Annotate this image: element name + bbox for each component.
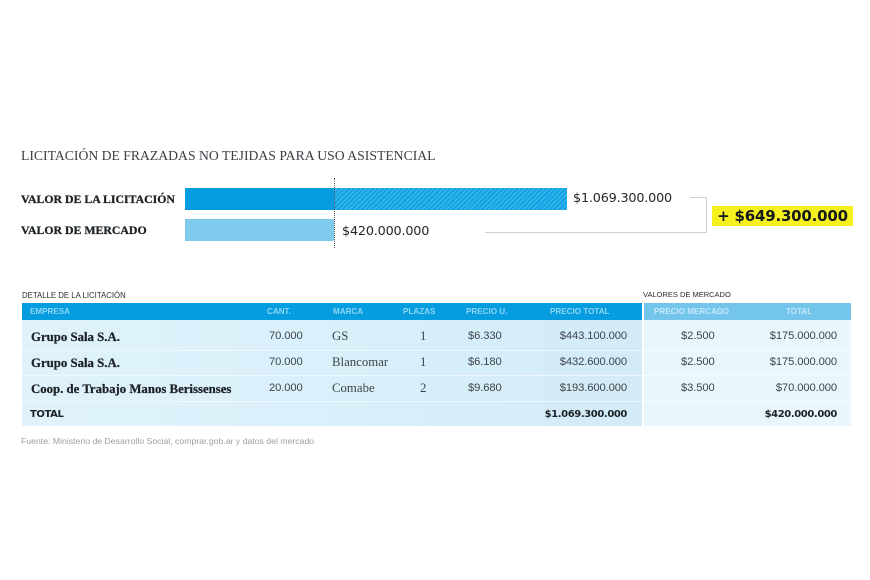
- market row 1: $175.000.000: [770, 330, 837, 342]
- market row 3: $3.500: [681, 382, 715, 394]
- dashed reference line: [334, 178, 335, 248]
- column headers: MARCA: [333, 307, 363, 316]
- row 3: $9.680: [468, 382, 502, 394]
- bar: licitación solid part: [185, 188, 334, 210]
- table body background: [22, 320, 642, 426]
- row 3: [31, 381, 627, 396]
- row 2: Blancomar: [332, 355, 388, 369]
- label: valor de mercado: VALOR DE MERCADO: [21, 223, 147, 237]
- row 1: GS: [332, 329, 348, 343]
- column headers: PLAZAS: [403, 307, 435, 316]
- market row 2: $175.000.000: [770, 356, 837, 368]
- market row dividers: [644, 350, 851, 351]
- panel: tabla licitación: [22, 303, 642, 426]
- callout: difference: + $649.300.000: [717, 207, 848, 225]
- difference connector: [485, 197, 707, 233]
- heading: valores de mercado: VALORES DE MERCADO: [643, 290, 731, 299]
- column headers: [30, 307, 610, 316]
- row 2: Grupo Sala S.A.: [31, 356, 120, 370]
- market row 1: [681, 330, 837, 342]
- row 1: Grupo Sala S.A.: [31, 330, 120, 344]
- bar chart: [21, 178, 853, 248]
- row 1: $6.330: [468, 330, 502, 342]
- row 1: $443.100.000: [560, 330, 627, 342]
- market row 2: [681, 356, 837, 368]
- panel: tabla mercado: [644, 303, 851, 426]
- market header bar: [644, 303, 851, 320]
- market row 2: $2.500: [681, 356, 715, 368]
- market total: $420.000.000: [765, 409, 837, 420]
- bar: licitación excess hatched part: [334, 188, 567, 210]
- row 2: 1: [420, 355, 426, 369]
- row 1: 70.000: [269, 330, 303, 342]
- row dividers: [22, 350, 642, 351]
- heading: detalle de la licitación: DETALLE DE LA LICITACIÓN: [22, 291, 126, 300]
- row 1: 1: [420, 329, 426, 343]
- total row: $1.069.300.000: [545, 409, 627, 420]
- row 3: Coop. de Trabajo Manos Berissenses: [31, 382, 231, 396]
- row 3: 2: [420, 381, 426, 395]
- column headers: EMPRESA: [30, 307, 70, 316]
- total row: [30, 409, 627, 420]
- column headers: PRECIO U.: [466, 307, 507, 316]
- market row 1: $2.500: [681, 330, 715, 342]
- title: LICITACIÓN DE FRAZADAS NO TEJIDAS PARA USO ASISTENCIAL: [21, 148, 436, 163]
- source note: Fuente: Ministerio de Desarrollo Social, comprar.gob.ar y datos del mercado: [21, 436, 314, 446]
- row 2: 70.000: [269, 356, 303, 368]
- row 3: $193.600.000: [560, 382, 627, 394]
- table header bar: [22, 303, 642, 320]
- row 3: Comabe: [332, 381, 375, 395]
- row 2: $6.180: [468, 356, 502, 368]
- value: licitación: $1.069.300.000: [573, 191, 672, 206]
- row 2: $432.600.000: [560, 356, 627, 368]
- row 2: [31, 355, 627, 370]
- value: mercado: $420.000.000: [342, 224, 429, 239]
- market row 3: [681, 382, 837, 394]
- column headers: CANT.: [267, 307, 291, 316]
- market headers: TOTAL: [786, 307, 812, 316]
- bar: mercado: [185, 219, 334, 241]
- column headers: PRECIO TOTAL: [550, 307, 610, 316]
- row 3: 20.000: [269, 382, 303, 394]
- label: valor de la licitación: VALOR DE LA LICITACIÓN: [21, 192, 175, 206]
- market headers: PRECIO MERCADO: [654, 307, 729, 316]
- market headers: [654, 307, 812, 316]
- total row: TOTAL: [30, 409, 63, 420]
- market body background: [644, 320, 851, 426]
- row 1: [31, 329, 627, 344]
- market row 3: $70.000.000: [776, 382, 837, 394]
